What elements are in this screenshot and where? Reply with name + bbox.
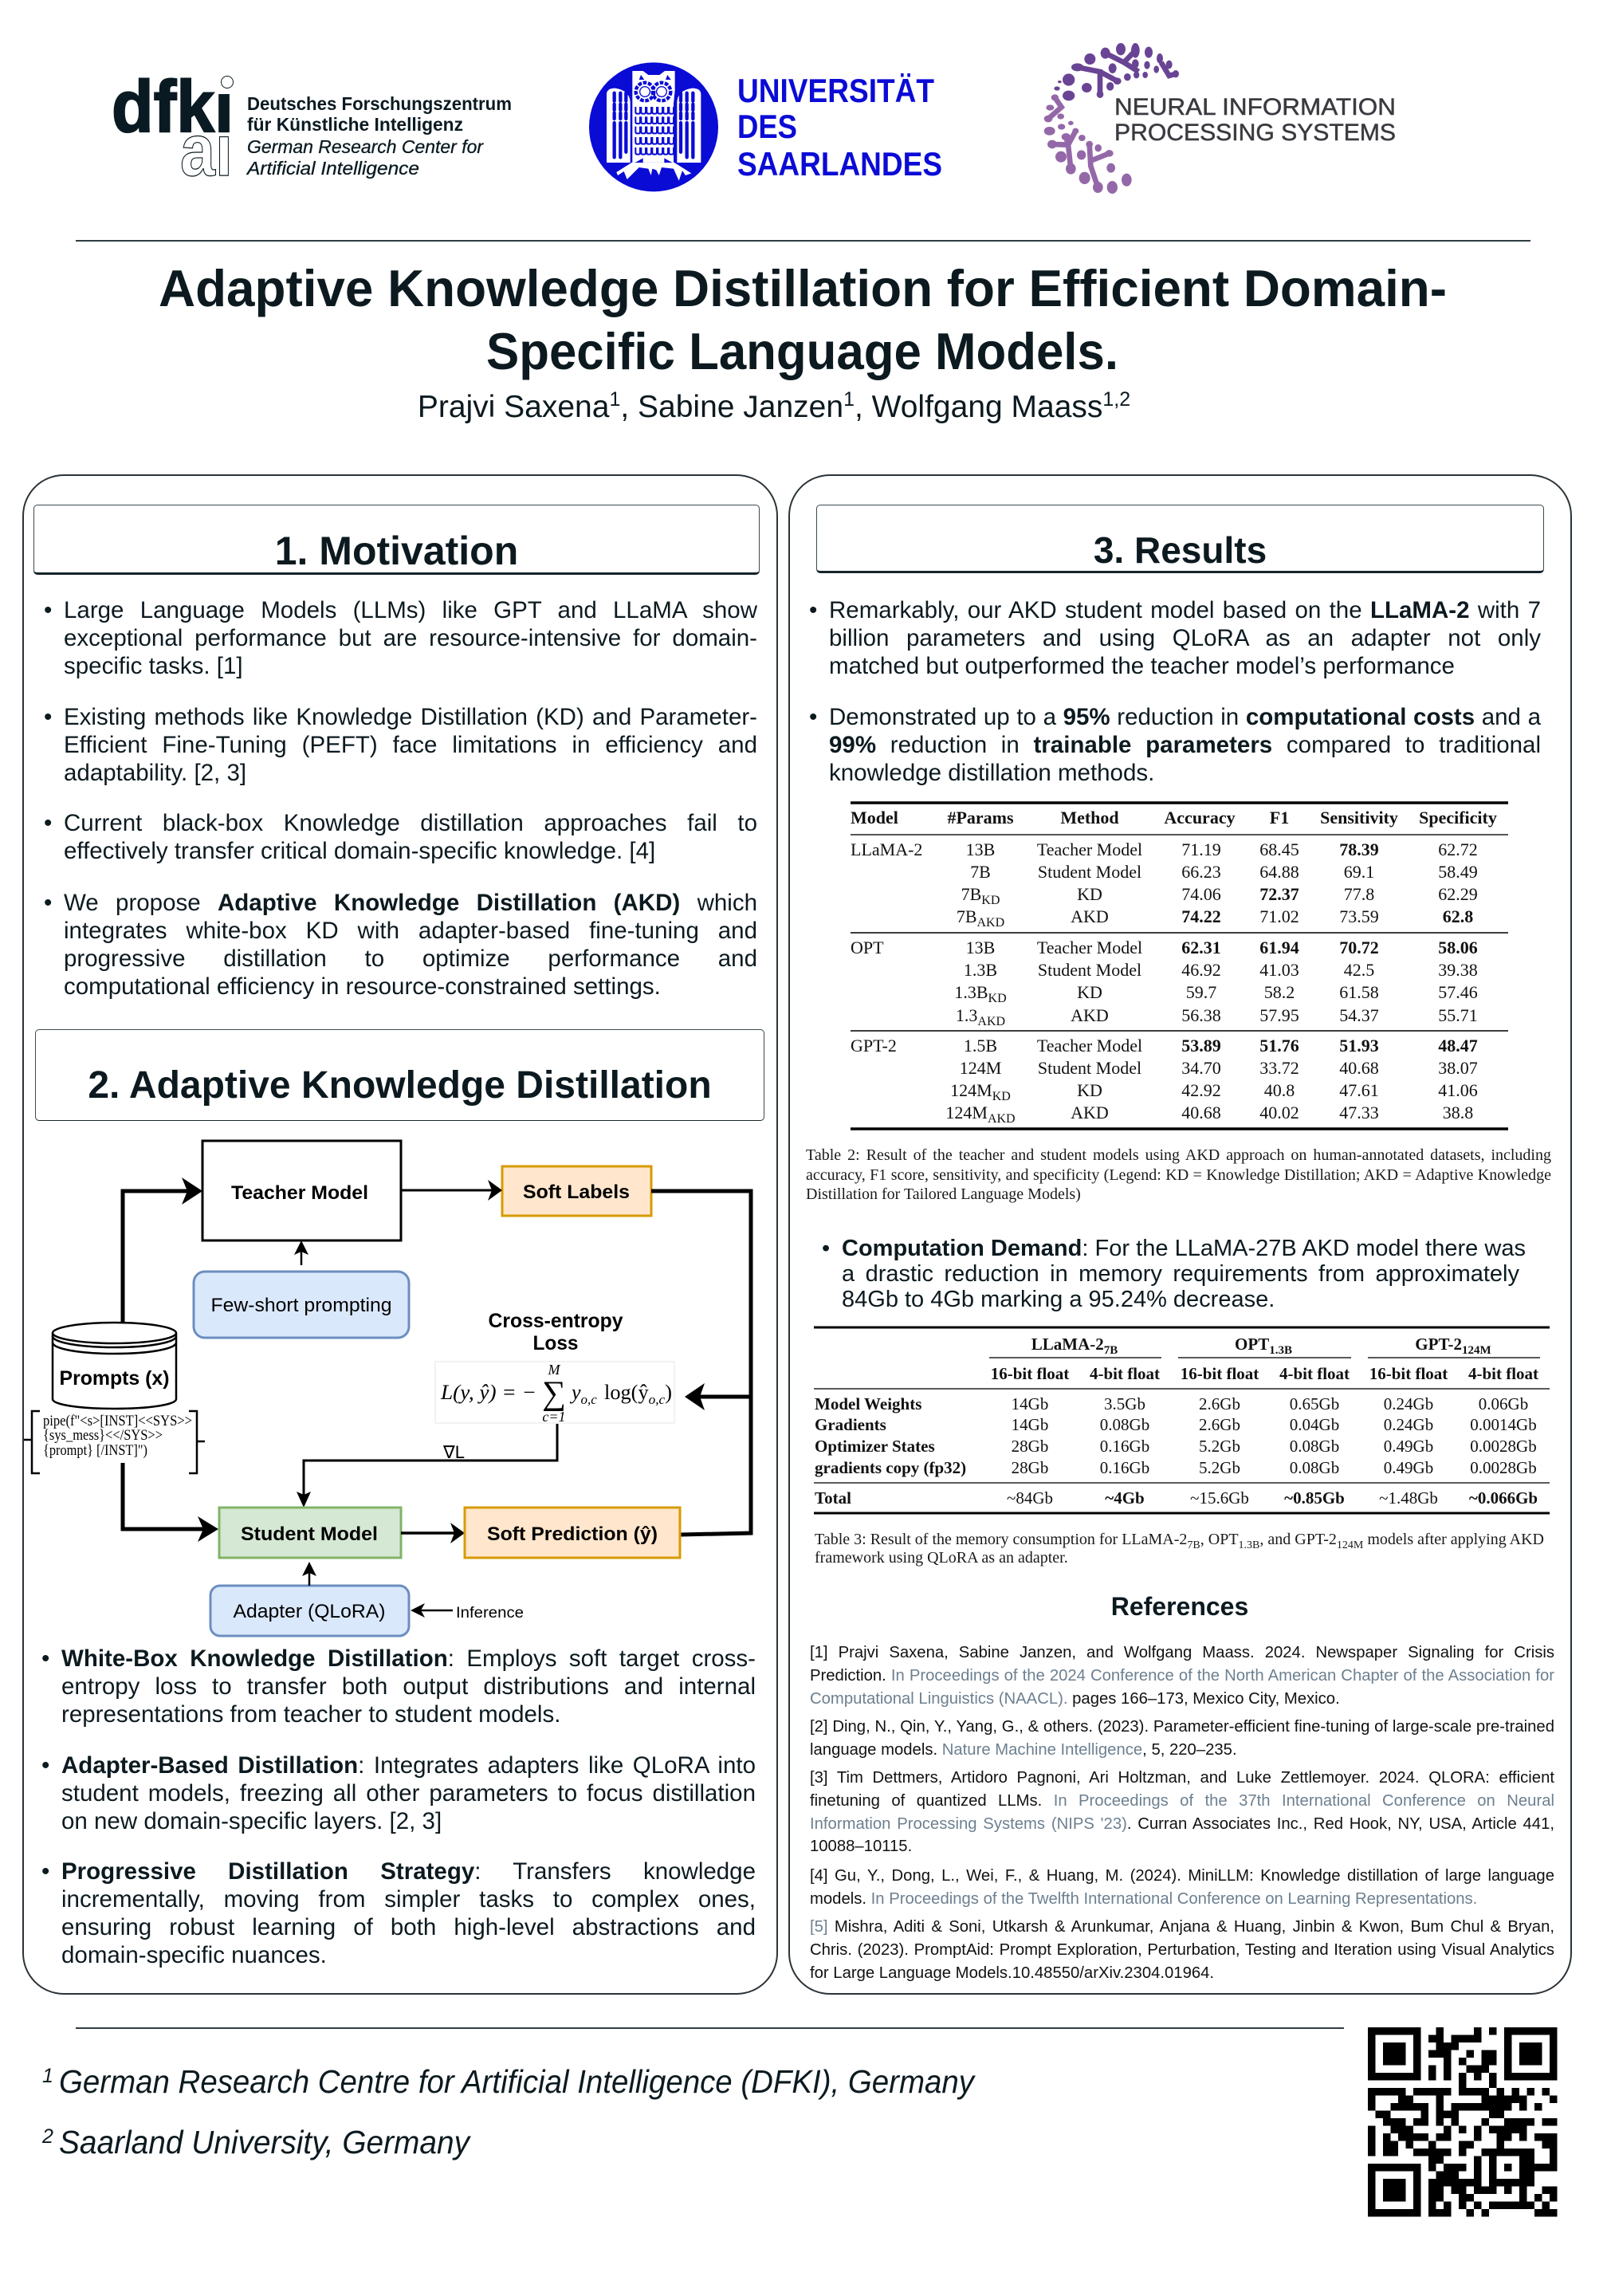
logo text: Neural Information Processing Systems [1114,94,1396,146]
table: memory consumption: ~0.066Gb [1469,1488,1538,1508]
table: teacher and student model results: 124M [945,1103,988,1122]
table: teacher and student model results: 70.72 [1339,938,1379,957]
text block: LLMs are resource-intensive: Large Language Models (LLMs) like GPT and LLaMA show [64,597,757,623]
reference 3: finetuning of quantized LLMs. In Proceedings of the 37th International Conference on Neural [810,1792,1554,1810]
footer: affiliations and QR code [0,2017,1607,2296]
table: memory consumption: 7B [1104,1344,1118,1357]
logo text: Universität des Saarlandes: DES [737,108,797,145]
text block: black-box KD limitations [44,810,757,864]
text block: existing methods: Efficient Fine-Tuning (PEFT) face limitations in efficiency and [64,732,757,758]
caption: table 2: accuracy, F1 score, sensitivity, and specificity (Legend: KD = Knowledge Distillation; AKD = Adaptive Knowledge [806,1166,1551,1183]
table: memory consumption: 16-bit float [991,1364,1069,1383]
table: memory consumption: 14Gb [1012,1394,1048,1413]
authors: , Sabine Janzen [620,390,843,424]
text block: existing methods [44,704,757,786]
table: teacher and student model results: 53.89 [1181,1036,1221,1056]
table: teacher and student model results: 124M [960,1058,1001,1078]
reference 2: language models. Nature Machine Intelligence, 5, 220–235. [810,1741,1237,1759]
table: teacher and student model results: 62.8 [1443,906,1473,926]
table: teacher and student model results: 57.95 [1259,1005,1299,1025]
logo: DFKI: German Research Center for [247,136,484,157]
page header: logos, title, authors [76,43,1530,424]
reference 2 [810,1718,1554,1759]
table: memory consumption: ~15.6Gb [1190,1488,1249,1508]
logo text: Universität des Saarlandes [737,72,942,183]
table: teacher and student model results: 56.38 [1181,1005,1221,1025]
table: teacher and student model results: 51.93 [1339,1036,1379,1056]
table: memory consumption: 0.04Gb [1290,1415,1339,1434]
table: teacher and student model results: 13B [966,839,995,859]
text block: white-box knowledge distillation: White-Box Knowledge Distillation: Employs soft target cross- [61,1645,756,1672]
panel: left column, motivation and adaptive knowledge distillation: • [41,1858,49,1885]
table: teacher and student model results: KD [988,992,1007,1005]
table: teacher and student model results: 41.03 [1259,960,1299,980]
icon: Prompts database cylinder [53,1323,176,1409]
reference 3 [810,1769,1554,1855]
reference 5: [5] Mishra, Aditi & Soni, Utkarsh & Arunkumar, Anjana & Huang, Jinbin & Kwon, Bum Chul & Bryan, [810,1918,1554,1936]
table: teacher and student model results: AKD [988,1112,1016,1126]
box: Soft Prediction [465,1508,680,1558]
table: teacher and student model results: OPT [851,938,884,957]
table: teacher and student model results: Teacher Model [1037,839,1142,859]
table: memory consumption: 14Gb [1012,1415,1048,1434]
table: memory consumption: 16-bit float [1369,1364,1448,1383]
table: teacher and student model results: 62.29 [1438,884,1478,904]
table: teacher and student model results: 58.49 [1438,862,1478,882]
box: Teacher Model: Teacher Model [231,1182,368,1204]
table: teacher and student model results: 41.06 [1438,1080,1478,1100]
formula: cross-entropy loss: o,c [581,1392,597,1407]
arrow: soft labels and soft prediction into loss [651,1191,751,1535]
table: teacher and student model results: 39.38 [1438,960,1478,980]
logo: DFKI [112,66,512,191]
table: teacher and student model results: Teacher Model [1037,938,1142,957]
table: memory consumption: 2.6Gb [1199,1394,1240,1413]
text block: progressive distillation strategy: domain-specific nuances. [61,1942,327,1968]
logo: DFKI: ai [180,110,233,191]
logo: DFKI: für Künstliche Intelligenz [247,114,463,135]
text block: adapter-based distillation: student models, freezing all other parameters to focus distillation [61,1780,756,1807]
code block: prompt template: pipe(f"<s>[INST]<<SYS>> [43,1413,192,1429]
table: memory consumption: ~84Gb [1007,1488,1053,1508]
table: memory consumption: 0.0028Gb [1470,1437,1537,1456]
table: teacher and student model results: 40.8 [1264,1080,1295,1100]
text block: AKD outperforms teacher: billion parameters and using QLoRA as an adapter not only [829,625,1541,651]
text block: reductions: knowledge distillation methods. [829,760,1154,786]
table: teacher and student model results: 40.68 [1181,1103,1221,1122]
reference 3: 10088–10115. [810,1838,912,1855]
table: teacher and student model results: 40.68 [1339,1058,1379,1078]
text block: progressive distillation strategy [41,1858,756,1968]
table: memory consumption: ~0.85Gb [1284,1488,1345,1508]
text block: AKD outperforms teacher: Remarkably, our AKD student model based on the LLaMA-2 with 7 [829,597,1541,623]
table: memory consumption: OPT [1235,1335,1269,1354]
table: teacher and student model results: 1.3 [956,1005,977,1025]
table: teacher and student model results: 58.2 [1264,982,1295,1002]
table: teacher and student model results: Method [1060,808,1119,828]
panel: left column, motivation and adaptive knowledge distillation: • [44,597,52,623]
table: teacher and student model results: 74.06 [1181,884,1221,904]
table: teacher and student model results: LLaMA-2 [851,839,922,859]
table: memory consumption: 0.0028Gb [1470,1458,1537,1477]
table: memory consumption: 2.6Gb [1199,1415,1240,1434]
panel: right column, results and references: • [809,704,817,730]
table: teacher and student model results: 57.46 [1438,982,1478,1002]
table: teacher and student model results: 54.37 [1339,1005,1379,1025]
heading: 1. Motivation: 1. Motivation [275,529,518,573]
table: teacher and student model results: 74.22 [1181,906,1221,926]
text block: adapter-based distillation: Adapter-Based Distillation: Integrates adapters like QLoRA into [61,1752,756,1779]
formula: cross-entropy loss: log(ŷ [604,1381,648,1404]
reference 1: Prediction. In Proceedings of the 2024 Conference of the North American Chapter of the Association for [810,1667,1554,1685]
reference 4: [4] Gu, Y., Dong, L., Wei, F., & Huang, M. (2024). MiniLLM: Knowledge distillation of large language [810,1867,1554,1885]
text block: reductions [809,704,1542,786]
box: Student Model [219,1508,401,1558]
table: memory consumption: 28Gb [1012,1437,1048,1456]
heading: 3. Results [816,505,1544,573]
table: memory consumption: 0.16Gb [1100,1437,1149,1456]
formula: cross-entropy loss: ∑ [542,1375,566,1412]
panel: right column, results and references: • [809,597,817,623]
arrow: inference [411,1603,524,1622]
logo: DFKI: Deutsches Forschungszentrum [247,93,512,114]
text block: adapter-based distillation [41,1752,756,1834]
reference 3: [3] Tim Dettmers, Artidoro Pagnoni, Ari Holtzman, and Luke Zettlemoyer. 2024. QLORA: efficient [810,1769,1554,1787]
text block: AKD outperforms teacher: matched but outperformed the teacher model’s performance [829,653,1455,679]
table: memory consumption: Total [815,1488,851,1508]
table: teacher and student model results: 68.45 [1259,839,1299,859]
caption: table 2: Distillation for Tailored Language Models) [806,1185,1081,1203]
table: teacher and student model results: 1.3B [964,960,997,980]
table: teacher and student model results: KD [992,1090,1011,1103]
affiliation 2: Saarland University, Germany [59,2124,471,2160]
box: Student Model: Student Model [241,1523,378,1545]
heading: 2. Adaptive Knowledge Distillation [35,1029,764,1121]
table: teacher and student model results: Student Model [1038,960,1141,980]
text block: LLMs are resource-intensive: exceptional performance but are resource-intensive for domain- [64,625,757,651]
reference 1: [1] Prajvi Saxena, Sabine Janzen, and Wolfgang Maass. 2024. Newspaper Signaling for Crisis [810,1644,1554,1661]
formula: cross-entropy loss: o,c [649,1392,666,1407]
text block: reductions: Demonstrated up to a 95% reduction in computational costs and a [829,704,1541,730]
panel: left column, motivation and adaptive knowledge distillation: • [41,1752,49,1779]
arrow: inference: Inference [456,1605,524,1622]
text block: black-box KD limitations: effectively transfer critical domain-specific knowledge. [4] [64,838,655,864]
table: teacher and student model results: 38.8 [1443,1103,1473,1122]
box: Few-shot prompting: Few-short prompting [210,1295,392,1316]
formula: cross-entropy loss: M [547,1362,561,1378]
logo: DFKI: Artificial Intelligence [246,158,419,179]
arrow: few-shot prompting to teacher [294,1240,308,1265]
panel: left column, motivation and adaptive knowledge distillation: • [44,810,52,836]
table: teacher and student model results: AKD [977,1015,1005,1028]
table: memory consumption: 1.3B [1269,1344,1292,1357]
table: teacher and student model results: KD [1077,1080,1102,1100]
logo text: Neural Information Processing Systems: NEURAL INFORMATION [1114,94,1396,120]
text block: progressive distillation strategy: Progressive Distillation Strategy: Transfers knowledge [61,1858,756,1885]
table: memory consumption: 0.24Gb [1384,1415,1433,1434]
table: memory consumption: ~4Gb [1105,1488,1145,1508]
table: teacher and student model results: 7B [957,906,977,926]
formula: cross-entropy loss [435,1362,674,1425]
table: memory consumption: Gradients [815,1415,886,1434]
arrow: student to soft prediction [401,1523,465,1543]
text block: AKD proposal: computational efficiency in resource-constrained settings. [64,973,661,1000]
text block: AKD outperforms teacher [809,597,1541,679]
table: teacher and student model results: KD [981,894,1000,907]
table: memory consumption: 28Gb [1012,1458,1048,1477]
box: Soft Labels: Soft Labels [523,1181,630,1203]
table: memory consumption: 16-bit float [1181,1364,1259,1383]
text block: computation demand [822,1236,1526,1312]
table: teacher and student model results: GPT-2 [851,1036,897,1056]
reference 1 [810,1644,1554,1708]
diagram: AKD architecture flow [24,1140,752,1637]
reference 5: for Large Language Models.10.48550/arXiv.2304.01964. [810,1964,1214,1982]
table: memory consumption: 0.08Gb [1290,1437,1339,1456]
table: teacher and student model results: KD [1077,884,1102,904]
table: teacher and student model results: KD [1077,982,1102,1002]
table: teacher and student model results: AKD [1071,1005,1109,1025]
label: cross-entropy loss [488,1310,623,1354]
text block: existing methods: adaptability. [2, 3] [64,760,246,786]
box: Teacher Model [202,1141,401,1240]
table: teacher and student model results: 7B [970,862,991,882]
authors: Prajvi Saxena [418,390,609,424]
text block: AKD proposal [44,890,757,1000]
affiliation 2: 2 [41,2125,53,2148]
box: Adapter (QLoRA): Adapter (QLoRA) [233,1601,386,1622]
box: Soft Prediction: Soft Prediction (ŷ) [487,1523,658,1545]
table: teacher and student model results: AKD [977,916,1004,930]
label: cross-entropy loss: Cross-entropy [488,1310,623,1332]
table: teacher and student model results: 46.92 [1181,960,1221,980]
authors: 1,2 [1102,388,1130,411]
table: teacher and student model results: 73.59 [1339,906,1379,926]
panel: right column, results and references: • [822,1236,830,1261]
table: teacher and student model results: Teacher Model [1037,1036,1142,1056]
text block: computation demand: a drastic reduction in memory requirements from approximately [842,1261,1519,1287]
text block: LLMs are resource-intensive [44,597,757,679]
reference 4: models. In Proceedings of the Twelfth International Conference on Learning Representations. [810,1890,1477,1908]
reference 4 [810,1867,1554,1908]
panel: left column, motivation and adaptive knowledge distillation: • [44,704,52,730]
text block: white-box knowledge distillation: representations from teacher to student models. [61,1701,560,1728]
affiliation 1: 1 [42,2065,53,2087]
table: memory consumption: 4-bit float [1468,1364,1538,1383]
table: teacher and student model results: 55.71 [1438,1005,1478,1025]
panel: right column, results and references [788,474,1572,1995]
table: teacher and student model results: 48.47 [1438,1036,1478,1056]
table: memory consumption [814,1327,1550,1515]
text block: white-box knowledge distillation: entropy loss to transfer both output distributions and internal [61,1673,756,1700]
box: Adapter (QLoRA) [210,1586,409,1636]
text block: white-box knowledge distillation [41,1645,756,1728]
table: teacher and student model results: Student Model [1038,1058,1141,1078]
table: teacher and student model results: 124M [950,1080,992,1100]
table: teacher and student model results: 78.39 [1339,839,1379,859]
panel: left column, motivation and adaptive knowledge distillation: • [41,1645,49,1672]
table: teacher and student model results: 42.92 [1181,1080,1221,1100]
table: teacher and student model results: 59.7 [1186,982,1216,1002]
table: teacher and student model results: 47.33 [1339,1103,1379,1122]
label: cross-entropy loss: Loss [532,1332,579,1354]
table: teacher and student model results: 58.06 [1438,938,1478,957]
table: teacher and student model results: 47.61 [1339,1080,1379,1100]
table: teacher and student model results: 40.02 [1259,1103,1299,1122]
caption: table 3: Table 3: Result of the memory consumption for LLaMA-27B, OPT1.3B, and GPT-2124M models after applying AKD [815,1531,1544,1551]
table: teacher and student model results: AKD [1071,1103,1109,1122]
table: teacher and student model results: 42.5 [1344,960,1374,980]
logo text: Universität des Saarlandes: SAARLANDES [737,145,942,183]
heading: references: References [1111,1592,1248,1621]
arrow: prompts to student [123,1463,218,1542]
table: teacher and student model results: F1 [1270,808,1289,828]
formula: cross-entropy loss: ) [665,1381,672,1404]
table: teacher and student model results: #Params [947,808,1014,828]
caption: table 3: framework using QLoRA as an adapter. [815,1549,1068,1567]
table: teacher and student model results: AKD [1071,906,1109,926]
reference 1: Computational Linguistics (NAACL). pages 166–173, Mexico City, Mexico. [810,1690,1340,1708]
table: teacher and student model results: Model [851,808,898,828]
formula: cross-entropy loss: c=1 [542,1409,566,1425]
heading: 1. Motivation [33,505,760,575]
arrow: prompts to teacher [123,1177,202,1323]
table: memory consumption: 0.16Gb [1100,1458,1149,1477]
logo: NeurIPS dotted arc [1044,43,1179,194]
table: teacher and student model results: Accuracy [1164,808,1236,828]
icon: Prompts database cylinder: Prompts (x) [59,1367,169,1390]
table: teacher and student model results: 38.07 [1438,1058,1478,1078]
box: Soft Labels [502,1166,651,1216]
table: memory consumption: 0.06Gb [1479,1394,1528,1413]
table: memory consumption: 0.24Gb [1384,1394,1433,1413]
table: teacher and student model results: 71.02 [1259,906,1299,926]
text block: AKD proposal: integrates white-box KD with adapter-based fine-tuning and [64,918,757,944]
table: teacher and student model results: 61.94 [1259,938,1299,957]
reference 2: [2] Ding, N., Qin, Y., Yang, G., & others. (2023). Parameter-efficient fine-tuning of large-scale pre-trained [810,1718,1554,1736]
table: teacher and student model results: Student Model [1038,862,1141,882]
heading: 2. Adaptive Knowledge Distillation: 2. Adaptive Knowledge Distillation [88,1064,712,1107]
table: memory consumption: 0.08Gb [1290,1458,1339,1477]
table: memory consumption: 0.08Gb [1100,1415,1149,1434]
label: gradient of loss: ∇L [442,1442,465,1462]
logo: Saarland University owl seal [589,62,718,191]
table: memory consumption: ~1.48Gb [1379,1488,1438,1508]
table: teacher and student model results: 62.72 [1438,839,1478,859]
table: teacher and student model results: 7B [961,884,981,904]
code block: prompt template: {prompt} [/INST]") [43,1442,147,1459]
table: teacher and student model results: 1.3B [954,982,988,1002]
logo: DFKI: dfki [112,66,234,147]
QR code [1368,2027,1558,2216]
panel: left column, motivation and adaptive knowledge distillation: • [44,890,52,916]
table: teacher and student model results: 72.37 [1259,884,1299,904]
table: teacher and student model results: 1.5B [964,1036,997,1056]
title: Specific Language Models. [486,322,1118,380]
formula: cross-entropy loss: L(y, ŷ) = − [440,1381,536,1404]
table: memory consumption: 0.0014Gb [1470,1415,1537,1434]
box: Few-shot prompting [194,1272,409,1338]
caption: table 2 [806,1146,1551,1203]
formula: cross-entropy loss: y [572,1381,581,1404]
text block: existing methods: Existing methods like Knowledge Distillation (KD) and Parameter- [64,704,757,730]
table: teacher and student model results: 51.76 [1259,1036,1299,1056]
text block: adapter-based distillation: on new domain-specific layers. [2, 3] [61,1808,442,1834]
table: teacher and student model results: 71.19 [1181,839,1221,859]
logo text: Universität des Saarlandes: UNIVERSITÄT [737,72,934,109]
caption: table 2: Table 2: Result of the teacher and student models using AKD approach on human-annotated datasets, including [806,1146,1551,1164]
arrow: gradient from loss to student [297,1424,557,1508]
affiliation 1: German Research Centre for Artificial Intelligence (DFKI), Germany [59,2063,976,2100]
table: memory consumption: 4-bit float [1279,1364,1350,1383]
table: memory consumption: 0.65Gb [1290,1394,1339,1413]
table: memory consumption: 4-bit float [1090,1364,1160,1383]
authors: 1 [843,388,855,411]
table: teacher and student model results: 34.70 [1181,1058,1221,1078]
heading: 3. Results: 3. Results [1094,529,1267,571]
text block: reductions: 99% reduction in trainable parameters compared to traditional [829,732,1541,758]
table: memory consumption: 124M [1462,1344,1491,1357]
text block: progressive distillation strategy: incrementally, moving from simpler tasks to complex ones, [61,1886,756,1913]
text block: AKD proposal: progressive distillation to optimize performance and [64,946,757,972]
table: teacher and student model results: 66.23 [1181,862,1221,882]
table: teacher and student model results: 61.58 [1339,982,1379,1002]
table: memory consumption: 5.2Gb [1199,1458,1240,1477]
reference 5 [810,1916,1554,1984]
logo text: Neural Information Processing Systems: PROCESSING SYSTEMS [1114,120,1396,146]
table: teacher and student model results: Sensitivity [1320,808,1398,828]
text block: computation demand: 84Gb to 4Gb marking a 95.24% decrease. [842,1287,1275,1312]
table: memory consumption: gradients copy (fp32) [815,1458,966,1477]
table: memory consumption: 5.2Gb [1199,1437,1240,1456]
arrow: adapter to student [302,1562,316,1586]
text block: black-box KD limitations: Current black-box Knowledge distillation approaches fail to [64,810,757,836]
table: teacher and student model results: 62.31 [1181,938,1221,957]
table: teacher and student model results: 69.1 [1344,862,1374,882]
table: teacher and student model results: Specificity [1419,808,1497,828]
table: memory consumption: 3.5Gb [1104,1394,1145,1413]
caption: table 3 [815,1531,1544,1567]
table: memory consumption: Optimizer States [815,1437,935,1456]
title: Adaptive Knowledge Distillation for Efficient Domain- [159,259,1447,317]
title [159,259,1447,380]
table: teacher and student model results: 77.8 [1344,884,1374,904]
authors: , Wolfgang Maass [855,390,1102,424]
table: memory consumption: 0.49Gb [1384,1458,1433,1477]
table: teacher and student model results: 13B [966,938,995,957]
arrow: teacher to soft labels [401,1180,502,1201]
code block: prompt template: {sys_mess}<</SYS>> [43,1427,163,1444]
text block: computation demand: Computation Demand: For the LLaMA-27B AKD model there was [842,1236,1526,1261]
table: memory consumption: LLaMA-2 [1031,1335,1104,1354]
text block: progressive distillation strategy: ensuring robust learning of both high-level abstractions and [61,1914,756,1940]
reference 5: Chris. (2023). PromptAid: Prompt Exploration, Perturbation, Testing and Iteration using Visual Analytics [810,1941,1554,1959]
authors: 1 [609,388,620,411]
panel: left column, motivation and adaptive knowledge distillation [22,474,778,1995]
text block: LLMs are resource-intensive: specific tasks. [1] [64,653,243,679]
table: teacher and student model results: 33.72 [1259,1058,1299,1078]
table: teacher and student model results: 64.88 [1259,862,1299,882]
reference 3: Information Processing Systems (NIPS '23). Curran Associates Inc., Red Hook, NY, USA, Article 441, [810,1815,1554,1833]
table: memory consumption: 0.49Gb [1384,1437,1433,1456]
code block: prompt template [24,1411,205,1473]
table: memory consumption: Model Weights [815,1394,921,1413]
table: teacher and student model results [851,801,1508,1130]
text block: AKD proposal: We propose Adaptive Knowledge Distillation (AKD) which [64,890,757,916]
table: memory consumption: GPT-2 [1415,1335,1462,1354]
